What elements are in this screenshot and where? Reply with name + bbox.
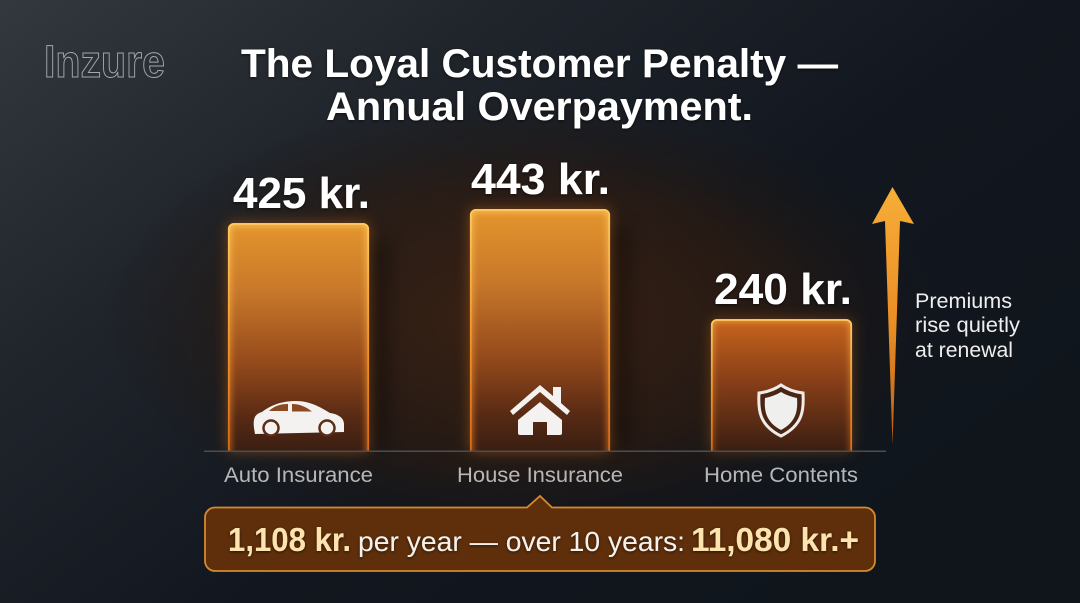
callout: total overpayment — [205, 496, 875, 571]
title — [241, 42, 838, 129]
icon: car — [254, 401, 344, 436]
callout: total overpayment: 1,108 kr. — [228, 521, 351, 558]
icon: house — [510, 385, 570, 435]
value: 240 kr.: 240 kr. — [714, 265, 852, 314]
annotation: premiums rise quietly — [915, 290, 1021, 362]
value labels — [233, 155, 852, 314]
title: The Loyal Customer Penalty — — [241, 42, 838, 86]
annotation: premiums rise quietly: rise quietly — [915, 314, 1021, 337]
value: 443 kr.: 443 kr. — [471, 155, 610, 204]
title: Annual Overpayment. — [326, 85, 753, 129]
baseline — [204, 450, 886, 452]
arrow: rising premiums — [872, 187, 914, 445]
label: Auto Insurance: Auto Insurance — [224, 464, 373, 487]
bar: Home Contents — [711, 319, 852, 460]
bar: Auto Insurance — [228, 223, 386, 460]
label: Home Contents: Home Contents — [704, 464, 858, 487]
callout: total overpayment: per year — over 10 years: — [358, 526, 685, 557]
value: 425 kr.: 425 kr. — [233, 169, 370, 218]
logo: Inzure: Inzure — [44, 36, 165, 87]
bar: House Insurance — [470, 209, 627, 460]
annotation: premiums rise quietly: Premiums — [915, 290, 1012, 313]
icon: shield — [759, 385, 803, 436]
annotation: premiums rise quietly: at renewal — [915, 339, 1013, 362]
label: House Insurance: House Insurance — [457, 464, 623, 487]
callout: total overpayment: 11,080 kr.+ — [691, 521, 859, 558]
category labels — [224, 464, 858, 487]
